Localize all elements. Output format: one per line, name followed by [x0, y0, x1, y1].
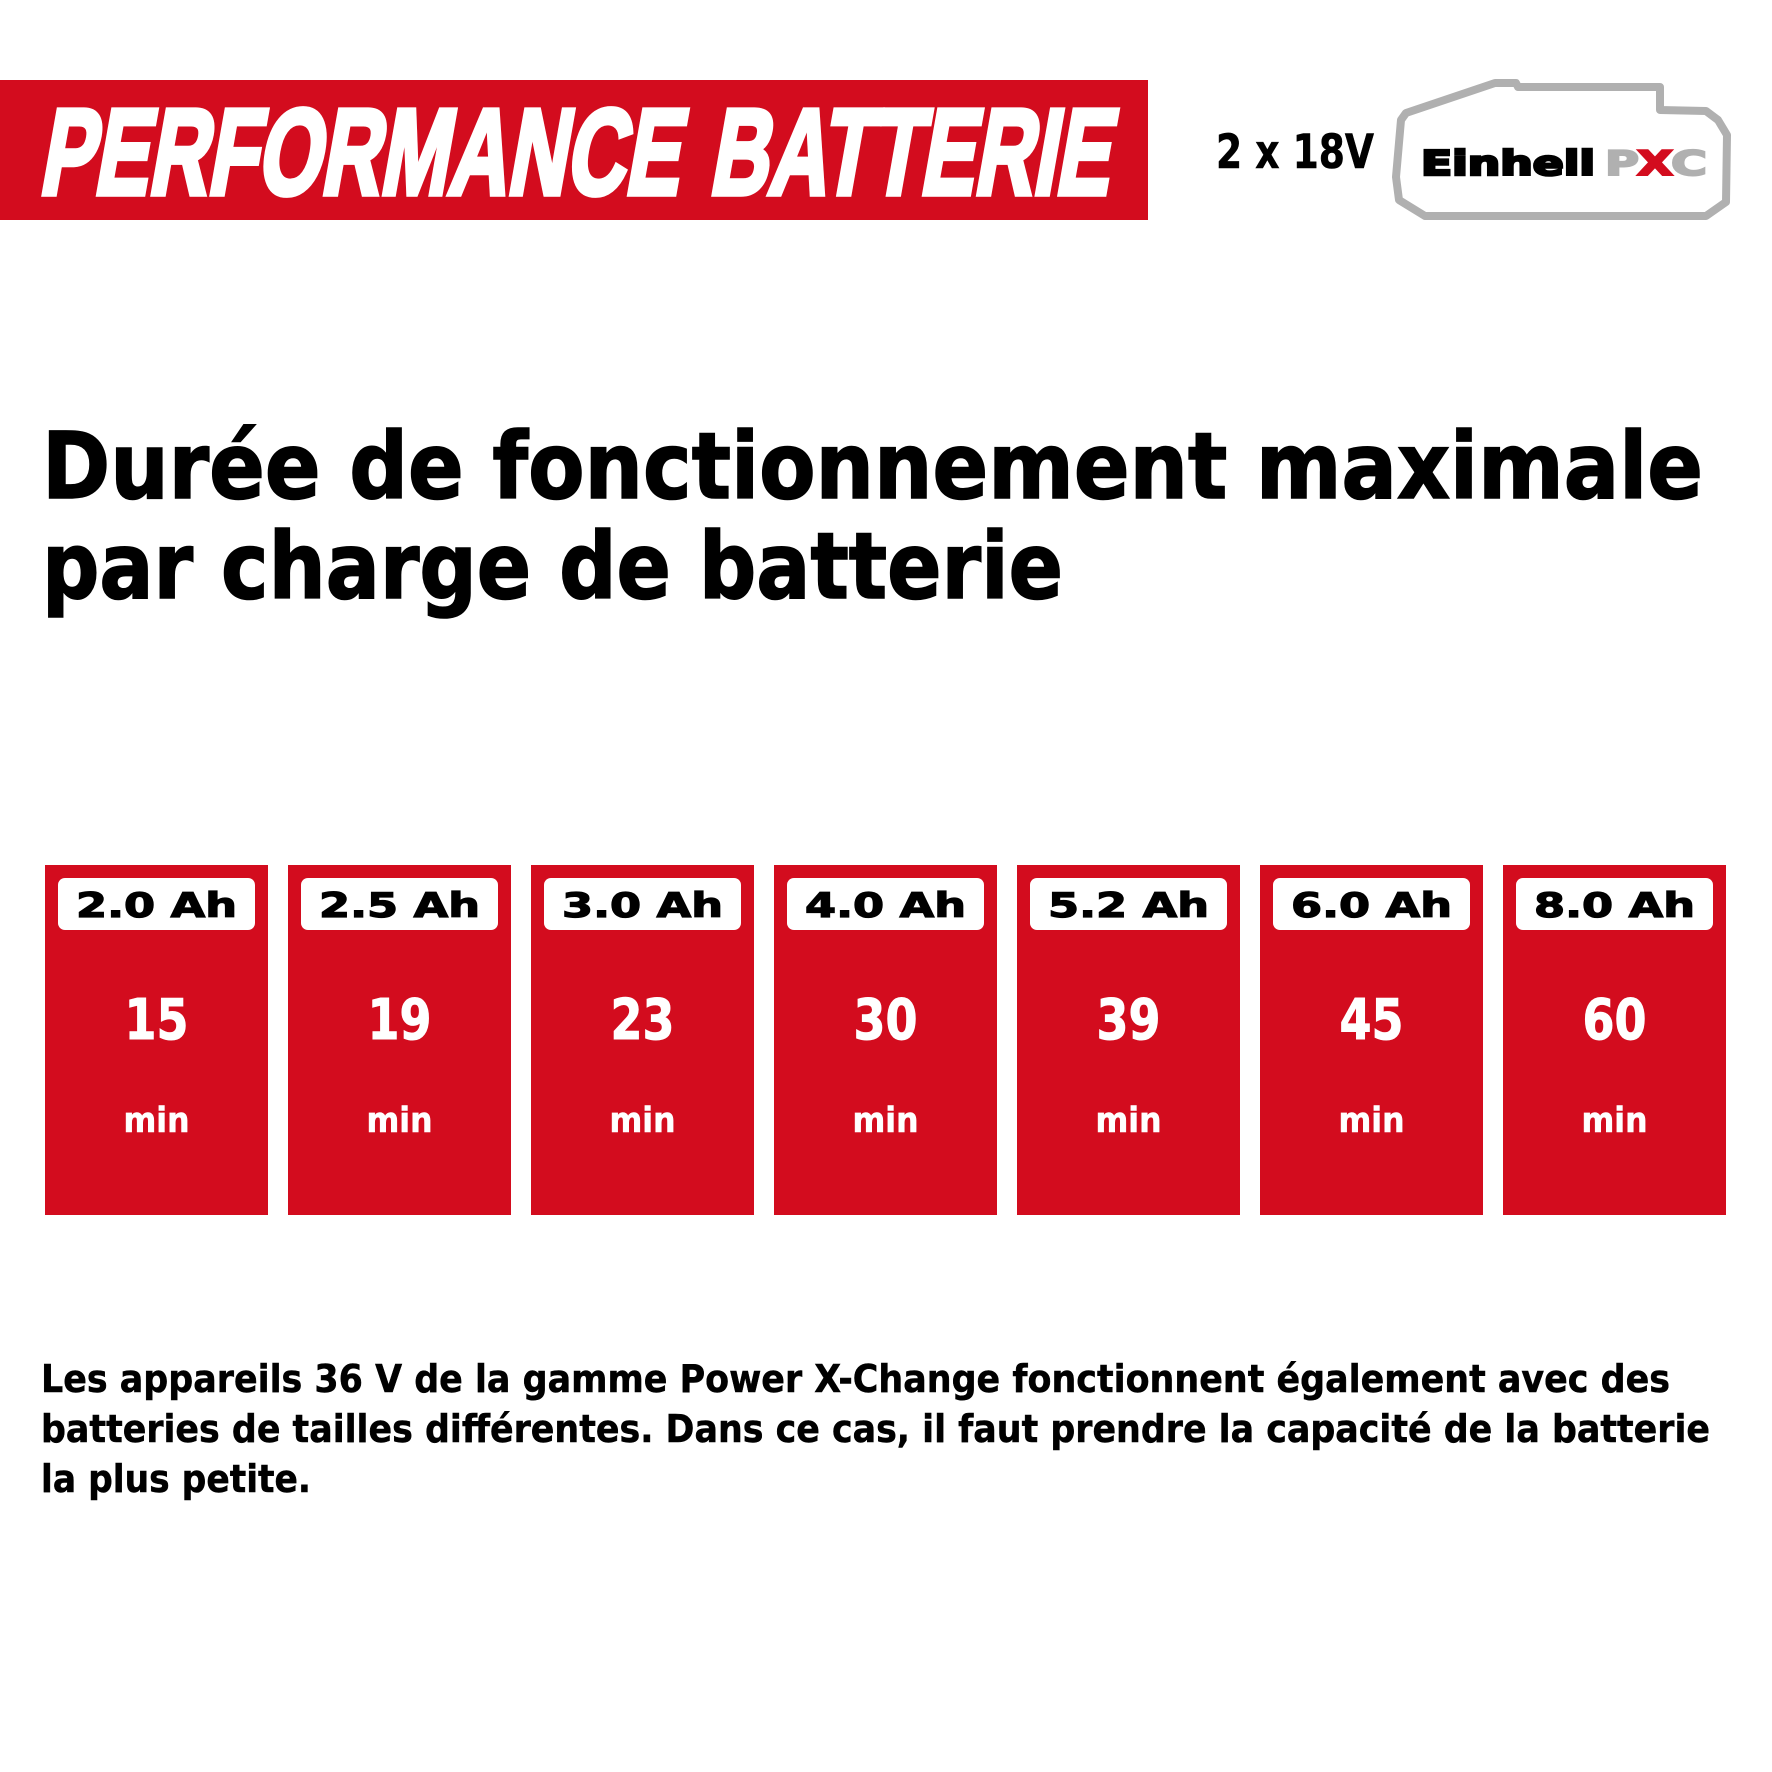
card: 8.0 Ah: [1503, 865, 1726, 1215]
voltage label: 2 x 18V: [1216, 125, 1374, 180]
icon: battery with Einhell PXC logo: X: [1637, 144, 1673, 184]
card: 2.5 Ah: min: [366, 1101, 432, 1141]
card: 5.2 Ah: min: [1096, 1101, 1162, 1141]
icon: battery with Einhell PXC logo: P: [1605, 144, 1639, 184]
card: 4.0 Ah: [774, 865, 997, 1215]
card: 4.0 Ah: min: [852, 1101, 918, 1141]
heading: par charge de batterie: [42, 513, 1063, 620]
card: 8.0 Ah: min: [1582, 1101, 1648, 1141]
card: 5.2 Ah: 39: [1096, 988, 1160, 1053]
card: 8.0 Ah: 60: [1582, 988, 1646, 1053]
card: 6.0 Ah: min: [1338, 1101, 1404, 1141]
card: 2.0 Ah: [45, 865, 268, 1215]
card: 2.5 Ah: 2.5 Ah: [319, 886, 480, 926]
card: 5.2 Ah: [1017, 865, 1240, 1215]
footnote text: [41, 1357, 1710, 1501]
card: 3.0 Ah: 23: [610, 988, 674, 1053]
card: 3.0 Ah: min: [610, 1101, 676, 1141]
card: 3.0 Ah: [531, 865, 754, 1215]
card: 2.0 Ah: min: [124, 1101, 190, 1141]
panel: battery runtime cards: [45, 865, 1726, 1215]
icon: battery with Einhell PXC logo: Einhell: [1421, 144, 1595, 184]
card: 2.0 Ah: 15: [124, 988, 188, 1053]
footnote text: Les appareils 36 V de la gamme Power X-Change fonctionnent également avec des: [41, 1357, 1670, 1401]
card: 6.0 Ah: [1260, 865, 1483, 1215]
footnote text: la plus petite.: [41, 1457, 311, 1501]
card: 3.0 Ah: 3.0 Ah: [562, 886, 723, 926]
card: 4.0 Ah: 30: [854, 988, 918, 1053]
card: 6.0 Ah: 6.0 Ah: [1291, 886, 1452, 926]
card: 2.5 Ah: 19: [368, 988, 432, 1053]
heading: [42, 413, 1703, 620]
banner: performance batterie: BATTERIE: [703, 85, 1127, 221]
banner: performance batterie: PERFORMANCE: [33, 85, 697, 221]
card: 5.2 Ah: 5.2 Ah: [1048, 886, 1209, 926]
icon: battery with Einhell PXC logo: C: [1671, 144, 1707, 184]
card: 2.5 Ah: [288, 865, 511, 1215]
card: 4.0 Ah: 4.0 Ah: [805, 886, 966, 926]
card: 6.0 Ah: 45: [1340, 988, 1404, 1053]
icon: battery with Einhell PXC logo: [1396, 83, 1727, 216]
card: 2.0 Ah: 2.0 Ah: [76, 886, 237, 926]
card: 8.0 Ah: 8.0 Ah: [1534, 886, 1695, 926]
